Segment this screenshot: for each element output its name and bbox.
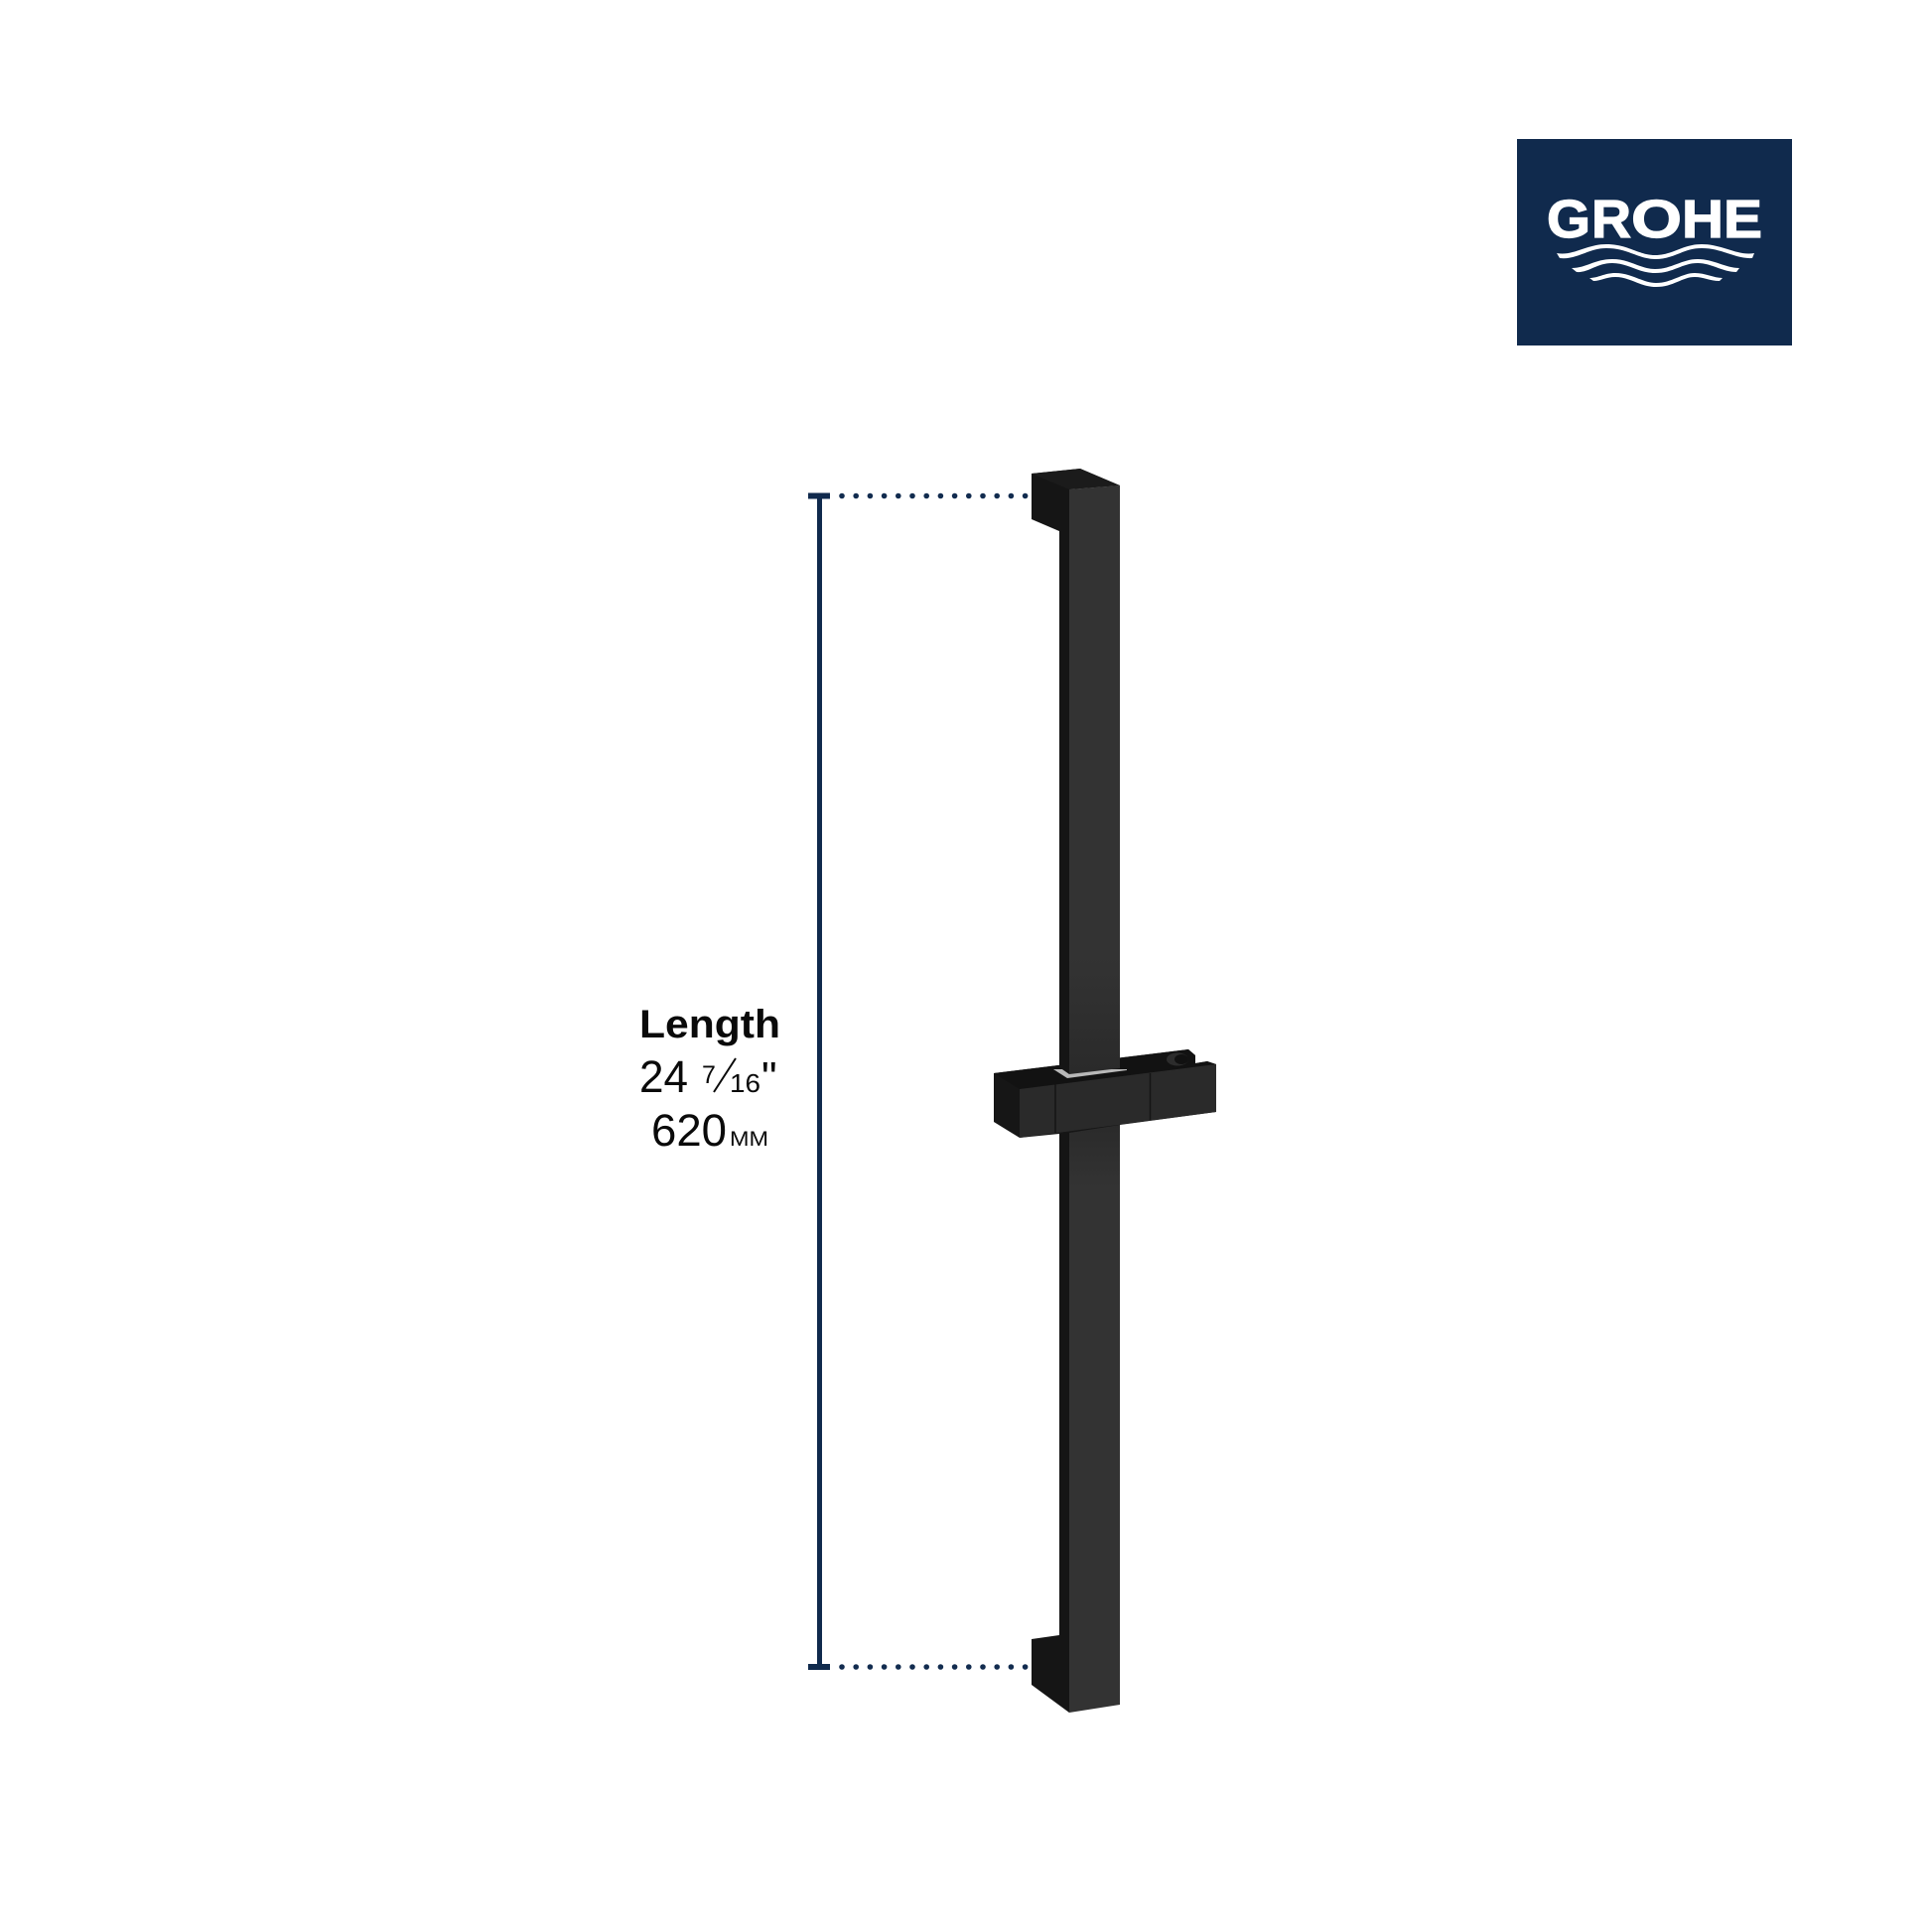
- dimension label: length: ": [761, 1053, 777, 1102]
- rail: side and top faces: [1032, 469, 1120, 1713]
- dimension label: length: 24: [639, 1051, 688, 1102]
- slider: metal plate: [1053, 1069, 1127, 1078]
- slider: body: [994, 1049, 1216, 1138]
- logo: GROHE: G: [1547, 190, 1590, 249]
- logo: GROHE: O: [1631, 190, 1682, 249]
- rail: lower front face: [1069, 1116, 1120, 1713]
- dimension line: length: [808, 492, 1028, 1670]
- slider: front face: [1020, 1064, 1216, 1138]
- logo: GROHE: E: [1724, 190, 1762, 249]
- dimension label: length: 620: [651, 1105, 727, 1156]
- shower rail product: [994, 469, 1216, 1713]
- rail: upper front face: [1069, 485, 1120, 1074]
- dimension label: length: 16: [730, 1068, 760, 1098]
- rail: upper dark side above slider: [1059, 531, 1069, 1074]
- logo: GROHE: R: [1591, 190, 1631, 249]
- logo: GROHE: [1517, 139, 1792, 345]
- dimension label: length: [639, 1003, 780, 1156]
- dimension label: length: MM: [730, 1128, 768, 1151]
- dimension label: length: 7: [702, 1061, 716, 1089]
- dimension label: length: Length: [639, 1003, 780, 1046]
- logo: GROHE: H: [1682, 190, 1724, 249]
- slider: top face: [994, 1049, 1216, 1089]
- slider: hose holder: [1167, 1052, 1188, 1066]
